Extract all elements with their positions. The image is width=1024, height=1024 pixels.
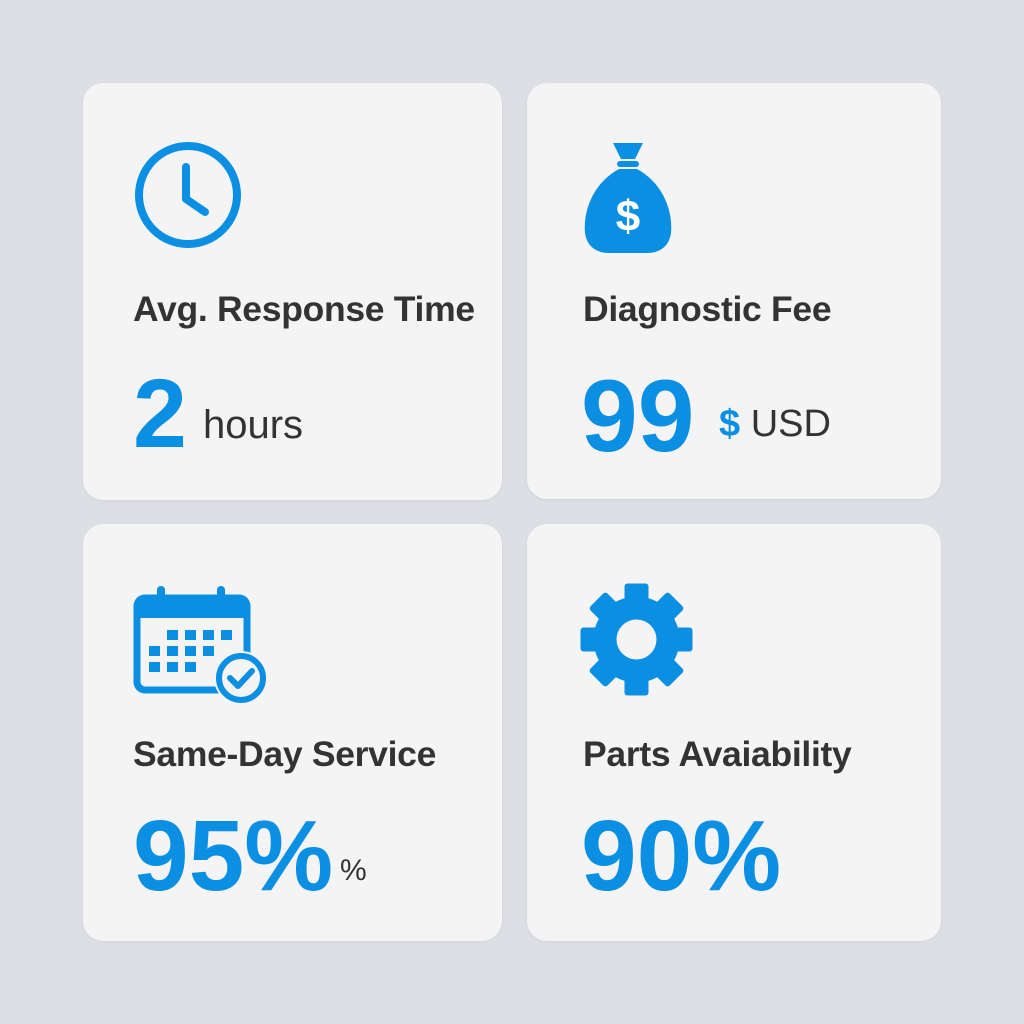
icon: gear bbox=[580, 584, 692, 696]
icon: money bag bbox=[584, 143, 672, 253]
value: 2 bbox=[133, 359, 187, 468]
label: Avg. Response Time bbox=[133, 289, 475, 329]
value: 95% bbox=[133, 800, 333, 912]
icon: calendar bbox=[134, 586, 266, 703]
label: Parts Avaiability bbox=[583, 734, 852, 774]
icon: clock bbox=[135, 142, 241, 248]
value: 90% bbox=[581, 800, 781, 912]
value: 99 bbox=[581, 359, 694, 473]
panel: parts availability bbox=[527, 524, 941, 941]
unit: % bbox=[340, 854, 367, 887]
icon: money bag: $ bbox=[616, 192, 640, 241]
panel: diagnostic fee bbox=[527, 83, 941, 499]
panel: response time bbox=[83, 83, 502, 500]
label: Diagnostic Fee bbox=[583, 289, 831, 329]
unit: $ USD bbox=[719, 403, 831, 445]
panel: same-day service bbox=[83, 524, 502, 941]
unit: hours bbox=[203, 403, 303, 447]
label: Same-Day Service bbox=[133, 734, 436, 774]
